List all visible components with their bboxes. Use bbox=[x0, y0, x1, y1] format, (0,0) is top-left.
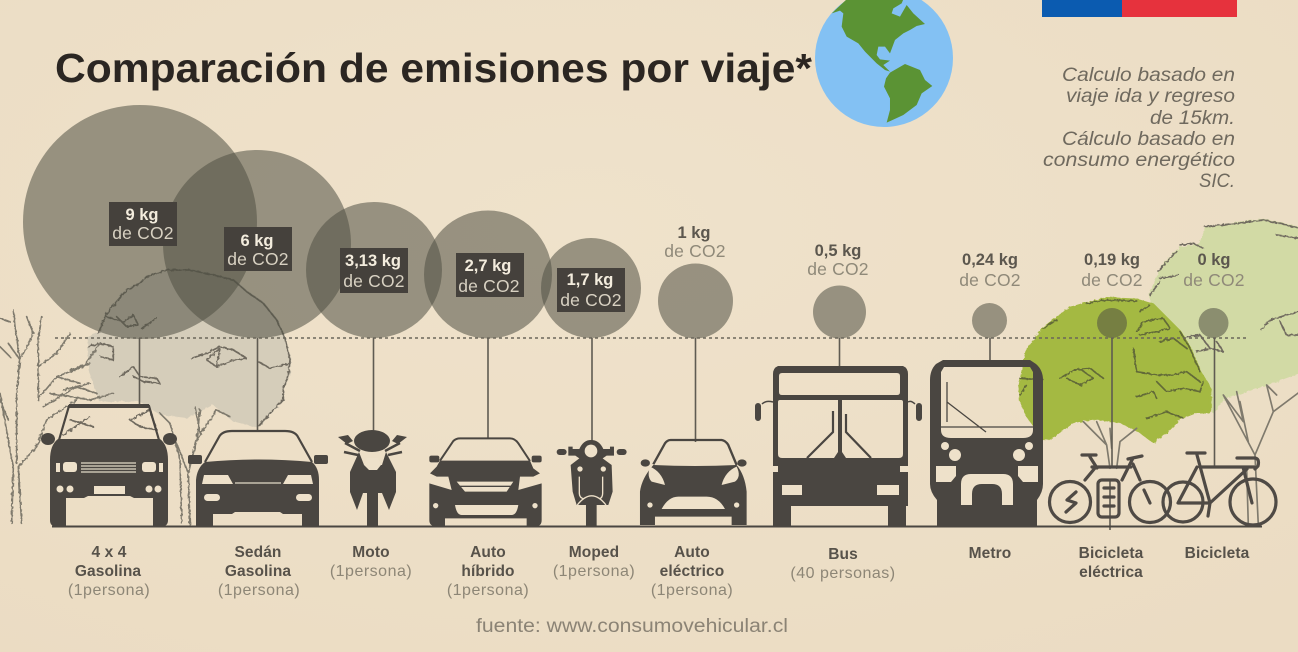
vehicle labels: (1persona) bbox=[447, 582, 529, 599]
value labels: 0,19 kg bbox=[1084, 251, 1140, 269]
vehicle labels: Bus bbox=[828, 546, 858, 563]
vehicle labels: eléctrico bbox=[660, 563, 724, 580]
vehicle labels: (1persona) bbox=[218, 582, 300, 599]
value labels: de CO2 bbox=[112, 223, 174, 243]
value labels: de CO2 bbox=[343, 271, 405, 291]
value labels: 6 kg bbox=[240, 232, 274, 250]
note text: de 15km. bbox=[1150, 108, 1235, 129]
note text: Cálculo basado en bbox=[1062, 129, 1235, 150]
vehicle labels: Gasolina bbox=[225, 563, 291, 580]
vehicle labels: Auto bbox=[674, 544, 710, 561]
source: fuente: www.consumovehicular.cl bbox=[476, 616, 788, 637]
vehicle: 4x4 bbox=[41, 404, 177, 526]
vehicle: bicycle bbox=[1163, 453, 1276, 525]
vehicle labels: eléctrica bbox=[1079, 564, 1143, 581]
note text: viaje ida y regreso bbox=[1066, 86, 1235, 107]
vehicle labels: (40 personas) bbox=[790, 565, 896, 582]
vehicle labels: Moped bbox=[569, 544, 619, 561]
value labels: 3,13 kg bbox=[345, 252, 401, 270]
flag stripe bbox=[1042, 0, 1237, 17]
note text: consumo energético bbox=[1043, 150, 1235, 171]
vehicle labels: (1persona) bbox=[651, 582, 733, 599]
note text: Calculo basado en bbox=[1062, 65, 1235, 86]
vehicle labels: (1persona) bbox=[330, 563, 412, 580]
value labels: 1,7 kg bbox=[567, 271, 613, 289]
vehicle labels: Auto bbox=[470, 544, 506, 561]
note text bbox=[1043, 65, 1235, 192]
vehicle labels: (1persona) bbox=[68, 582, 150, 599]
tree: bare left bbox=[0, 310, 230, 527]
tree: light green bbox=[1150, 220, 1298, 525]
vehicle labels: Moto bbox=[352, 544, 390, 561]
value labels: 0,24 kg bbox=[962, 251, 1018, 269]
value labels: 0,5 kg bbox=[815, 242, 861, 260]
vehicle: hybrid car bbox=[429, 438, 542, 526]
vehicle: sedan bbox=[188, 431, 328, 526]
title: Comparación de emisiones por viaje* bbox=[55, 45, 812, 91]
vehicle labels: Bicicleta bbox=[1079, 545, 1144, 562]
vehicle: moped bbox=[557, 440, 627, 526]
vehicle labels: (1persona) bbox=[553, 563, 635, 580]
value labels: de CO2 bbox=[664, 241, 726, 261]
vehicle labels: Bicicleta bbox=[1185, 545, 1250, 562]
ground line bbox=[52, 526, 1262, 528]
vehicle: motorcycle bbox=[338, 430, 407, 526]
value labels: de CO2 bbox=[959, 270, 1021, 290]
vehicle: bus bbox=[758, 366, 919, 526]
value labels: de CO2 bbox=[1081, 270, 1143, 290]
value labels: de CO2 bbox=[560, 290, 622, 310]
value labels: de CO2 bbox=[227, 249, 289, 269]
vehicle: electric bicycle bbox=[1050, 455, 1170, 522]
vehicle: electric car bbox=[640, 440, 747, 525]
value labels: 0 kg bbox=[1197, 251, 1231, 269]
vehicle labels: Metro bbox=[969, 545, 1011, 562]
tree: beige left bbox=[63, 270, 290, 435]
tree: green bbox=[1020, 298, 1210, 468]
value labels: de CO2 bbox=[458, 276, 520, 296]
chart: emission circles bbox=[23, 105, 1228, 339]
value labels bbox=[109, 202, 1245, 312]
value labels: de CO2 bbox=[807, 259, 869, 279]
icon: globe bbox=[815, 0, 953, 127]
baseline dotted line and stems bbox=[55, 338, 1247, 530]
vehicle labels bbox=[68, 544, 1250, 599]
vehicle labels: Gasolina bbox=[75, 563, 141, 580]
vehicle: metro bbox=[930, 360, 1043, 526]
vehicle labels: 4 x 4 bbox=[92, 544, 127, 561]
value labels: 2,7 kg bbox=[465, 257, 511, 275]
value labels: 1 kg bbox=[677, 224, 711, 242]
vehicle labels: híbrido bbox=[461, 563, 515, 580]
vehicle labels: Sedán bbox=[234, 544, 282, 561]
value labels: de CO2 bbox=[1183, 270, 1245, 290]
value labels: 9 kg bbox=[125, 206, 159, 224]
note text: SIC. bbox=[1199, 171, 1235, 192]
